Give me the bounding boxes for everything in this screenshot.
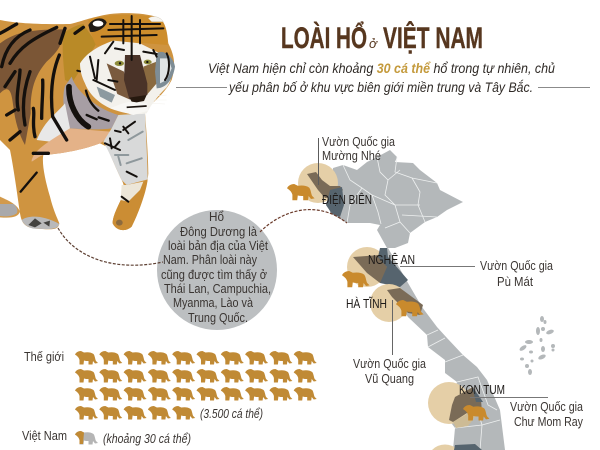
label: Nghệ An: NGHỆ AN <box>368 252 415 267</box>
label: Chư Mom Ray: Vườn Quốc gia <box>510 400 583 414</box>
label: Pù Mát: Pù Mát <box>497 275 533 289</box>
callout: Hổ Đông Dương: Myanma, Lào và <box>173 296 253 310</box>
callout: Hổ Đông Dương: cũng được tìm thấy ở <box>161 268 267 282</box>
icon: tiger Điện Biên <box>287 184 315 200</box>
icon: tiger Hà Tĩnh <box>396 300 424 316</box>
highlight: Nghệ An <box>347 247 408 287</box>
label: Mường Nhé <box>318 135 395 185</box>
title: VIỆT NAM <box>383 21 483 55</box>
label: Việt Nam: Việt Nam <box>22 429 67 443</box>
label: Vũ Quang <box>353 300 426 386</box>
label: Mường Nhé: Vườn Quốc gia <box>322 135 395 149</box>
label: Pù Mát: Vườn Quốc gia <box>480 259 553 273</box>
saddle <box>0 29 63 145</box>
title: ở <box>369 36 378 51</box>
label: Vũ Quang: Vườn Quốc gia <box>353 357 426 371</box>
hind foot <box>22 217 59 229</box>
chest <box>63 77 118 129</box>
rear leg <box>0 197 20 218</box>
face <box>80 41 172 114</box>
highlight: southern park <box>432 444 482 450</box>
label: khoảng 30 cá thể: (khoảng 30 cá thể) <box>103 432 191 446</box>
icon: tiger Nghệ An <box>342 271 370 287</box>
stripes <box>0 16 169 202</box>
pictogram: world tigers <box>75 351 317 420</box>
subtitle text: Việt Nam hiện chỉ còn khoảng 30 cá thể hổ trong tự nhiên, chủ <box>208 60 555 76</box>
ears <box>88 18 107 32</box>
label: Chư Mom Ray <box>470 398 584 429</box>
icon: Vietnam tiger <box>75 431 98 444</box>
islands <box>519 316 555 375</box>
tiger illustration <box>0 13 175 230</box>
callout: Hổ Đông Dương: Hổ <box>209 210 224 224</box>
callout: Hổ Đông Dương: Trung Quốc. <box>188 311 248 325</box>
label: Vũ Quang: Vũ Quang <box>365 372 414 386</box>
belly <box>32 128 110 162</box>
callout: Hổ Đông Dương: Thái Lan, Campuchia, <box>164 282 271 296</box>
title <box>281 21 483 55</box>
label: Kon Tum: KON TUM <box>459 383 505 397</box>
callout: Hổ Đông Dương: Đông Dương là <box>180 225 257 239</box>
callout: Hổ Đông Dương: Nam. Phân loài này <box>163 253 258 267</box>
label: Điện Biên: ĐIỆN BIÊN <box>322 192 372 207</box>
label: Chư Mom Ray: Chư Mom Ray <box>514 415 584 429</box>
head top <box>88 15 168 47</box>
arrow: callout to Điện Biên <box>260 210 347 232</box>
title: LOÀI HỔ <box>281 21 367 55</box>
icon: tiger Kon Tum <box>463 405 489 421</box>
highlight: Hà Tĩnh <box>370 284 423 322</box>
label: Hà Tĩnh: HÀ TĨNH <box>346 296 387 311</box>
label: Thế giới: Thế giới <box>24 350 64 364</box>
foreleg <box>103 113 148 185</box>
label: Pù Mát <box>400 259 553 289</box>
map of Vietnam <box>330 150 505 450</box>
label: 3.500 cá thể: (3.500 cá thể) <box>200 407 263 421</box>
subtitle text <box>208 60 555 95</box>
callout: Hổ Đông Dương: loài bản địa của Việt <box>168 239 268 253</box>
arrow: tiger to callout <box>58 228 163 265</box>
callout: Hổ Đông Dương <box>157 210 277 330</box>
highlight: Điện Biên <box>298 163 344 217</box>
label: Mường Nhé: Mường Nhé <box>322 149 381 163</box>
highlight: Kon Tum <box>428 382 483 428</box>
paw marks <box>28 218 50 227</box>
subtitle text: yếu phân bố ở khu vực biên giới miền trung và Tây Bắc. <box>228 79 533 95</box>
